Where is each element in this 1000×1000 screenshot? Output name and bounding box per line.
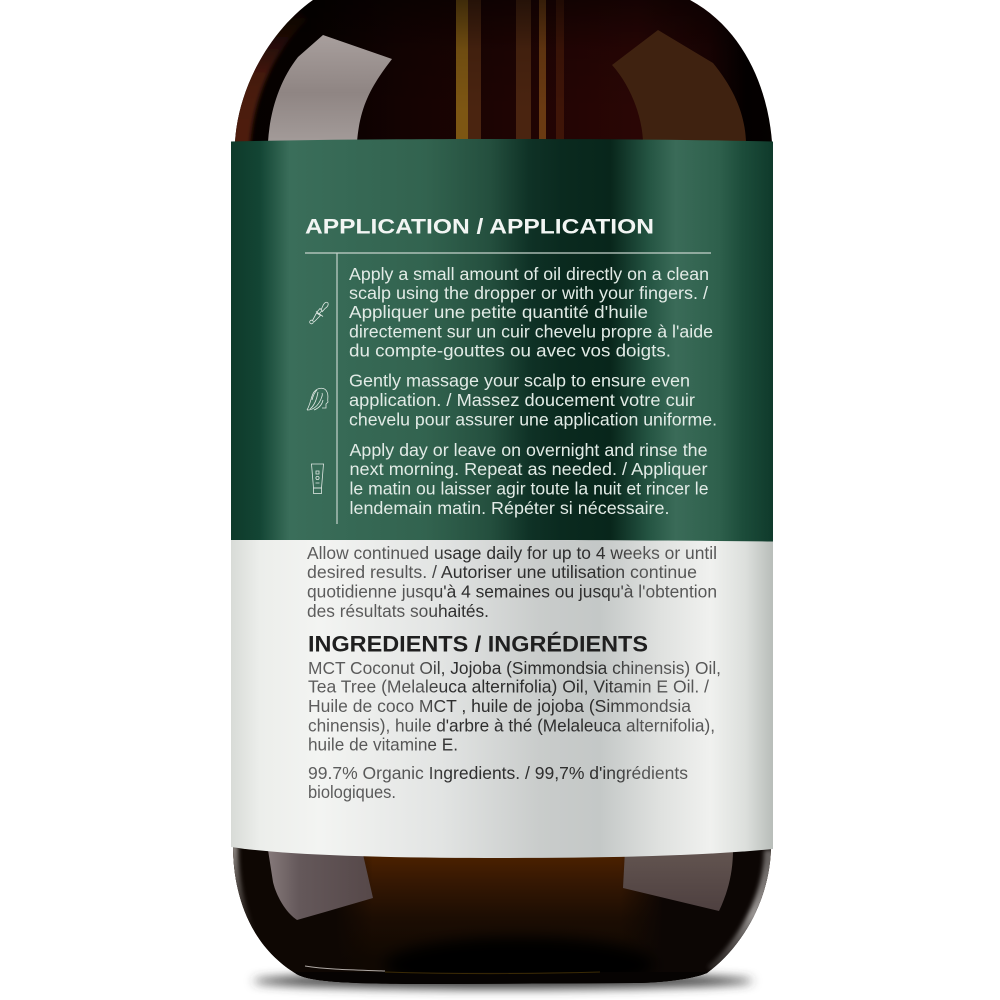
glass rim left (240, 12, 300, 145)
bottom glass reflection right (623, 850, 733, 911)
label: white section (231, 538, 773, 858)
rim brown line (385, 972, 600, 974)
bottle shadow (253, 973, 753, 989)
dark pool at base (389, 934, 650, 984)
text block: organic percentage (308, 763, 688, 802)
lower band (294, 972, 708, 984)
text block: step 1: Appliquer une petite quantité d'huile (349, 302, 648, 322)
icon: dropper (310, 302, 328, 324)
rim highlight (305, 966, 385, 971)
text block: step 2: application. / Massez doucement votre cuir (349, 390, 695, 410)
text block: step 3: Apply day or leave on overnight and rinse the (350, 440, 708, 460)
vertical streaks (456, 0, 564, 142)
text block: continued usage: des résultats souhaités. (307, 601, 489, 621)
text block: step 3 (350, 440, 708, 518)
text block: ingredients: huile de vitamine E. (308, 734, 458, 754)
text block: organic percentage: biologiques. (308, 782, 396, 802)
top glass reflection right (612, 30, 746, 142)
text block: step 1: Apply a small amount of oil directly on a clean (349, 264, 709, 284)
text block: ingredients: Tea Tree (Melaleuca alternifolia) Oil, Vitamin E Oil. / (308, 676, 709, 696)
text block: continued usage: Allow continued usage daily for up to 4 weeks or until (307, 543, 717, 563)
text block: continued usage: quotidienne jusqu'à 4 semaines ou jusqu'à l'obtention (307, 582, 717, 602)
text block: ingredients (308, 658, 721, 754)
text block: step 3: lendemain matin. Répéter si nécessaire. (350, 498, 670, 518)
divider lines (305, 253, 711, 524)
glass edge right (712, 850, 771, 972)
text block: step 3: le matin ou laisser agir toute la nuit et rincer le (350, 478, 708, 498)
text block: step 2: Gently massage your scalp to ensure even (349, 370, 690, 390)
icon: tube (311, 464, 324, 494)
bottle bottom (230, 845, 775, 993)
label: green section (231, 139, 773, 542)
heading: application: APPLICATION / APPLICATION (305, 214, 654, 238)
text block: organic percentage: 99.7% Organic Ingredients. / 99,7% d'ingrédients (308, 763, 688, 783)
text block: step 3: next morning. Repeat as needed. / Appliquer (350, 459, 708, 479)
text block: continued usage (307, 543, 717, 621)
text block: step 2: chevelu pour assurer une application uniforme. (349, 410, 717, 430)
text block: step 1: scalp using the dropper or with your fingers. / (349, 283, 708, 303)
text block: step 1: directement sur un cuir chevelu propre à l'aide (349, 322, 713, 342)
glass edge left (233, 845, 250, 932)
text block: ingredients: MCT Coconut Oil, Jojoba (Simmondsia chinensis) Oil, (308, 658, 721, 678)
text block: ingredients: Huile de coco MCT , huile de jojoba (Simmondsia (308, 696, 691, 716)
heading: ingredients: INGREDIENTS / INGRÉDIENTS (308, 632, 648, 656)
text block: step 2 (349, 370, 717, 430)
text block: step 1 (349, 264, 713, 360)
icon: head with hair (307, 388, 328, 410)
text block: continued usage: desired results. / Autoriser une utilisation continue (307, 562, 697, 582)
text block: ingredients: chinensis), huile d'arbre à thé (Melaleuca alternifolia), (308, 716, 715, 736)
top glass reflection left (268, 35, 392, 142)
text block: step 1: du compte-gouttes ou avec vos doigts. (349, 340, 671, 360)
bottom glass reflection left (268, 850, 373, 920)
bottle top (230, 0, 775, 145)
